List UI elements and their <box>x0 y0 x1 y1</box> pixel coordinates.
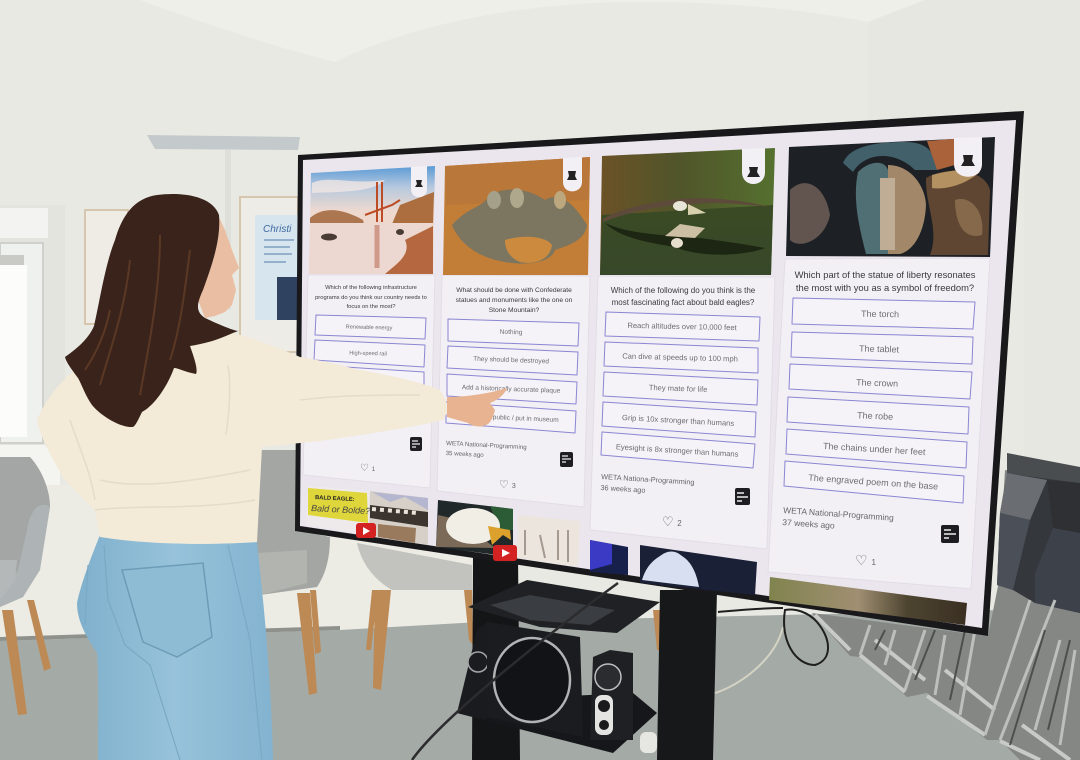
card 4 options: The engraved poem on the base <box>808 472 938 492</box>
chair: behind the woman <box>257 450 330 695</box>
wall posters <box>85 197 298 352</box>
card 4 image: statue of liberty <box>786 137 995 257</box>
display screen <box>300 120 1016 628</box>
card 1 panel <box>303 275 435 488</box>
card 3 badge <box>735 488 750 505</box>
card 2 options: Move to public / put in museum <box>467 413 559 424</box>
card 1 question: programs do you think our country needs to <box>315 295 427 301</box>
card 2 options: Add a historically accurate plaque <box>462 384 561 395</box>
card 4 author: 37 weeks ago <box>782 517 835 531</box>
card 3 question: most fascinating fact about bald eagles? <box>612 298 755 307</box>
window <box>0 205 65 485</box>
card 4 like count: ♡ 1 <box>855 552 876 568</box>
card 3 options: Eyesight is 8x stronger than humans <box>616 442 739 459</box>
chair: far left <box>0 457 51 715</box>
card 2 options: They should be destroyed <box>473 356 549 365</box>
stacked chairs <box>812 453 1080 760</box>
card 1 badge <box>410 437 422 451</box>
card 1 options: High-speed rail <box>349 351 387 357</box>
sweater <box>37 323 447 544</box>
card 4 options: The crown <box>856 377 898 389</box>
card 3 options: Can dive at speeds up to 100 mph <box>622 351 738 364</box>
card 3 author: WETA Nationa-Programming <box>601 472 695 487</box>
card 3 author: 36 weeks ago <box>600 483 646 495</box>
card 2 question: Stone Mountain? <box>489 307 540 314</box>
card 1 options: Renewable energy <box>346 324 393 332</box>
card 1 <box>303 166 435 488</box>
hair <box>65 194 238 427</box>
jeans pocket <box>122 563 212 657</box>
card 4 <box>768 137 995 589</box>
wall posters: Christi <box>263 224 292 235</box>
card 2 author: WETA National-Programming <box>446 440 527 451</box>
card 2 question: statues and monuments like the one on <box>456 297 573 304</box>
card 4 options: The torch <box>861 309 899 319</box>
power plug <box>640 732 657 753</box>
hair highlights <box>85 235 190 395</box>
card 4 options: The tablet <box>859 343 900 355</box>
card 3 options: They mate for life <box>649 383 708 394</box>
card 2 question: What should be done with Confederate <box>456 287 572 294</box>
thumbnail: bald eagle title: Bald or Bolde? <box>311 503 370 516</box>
thumbnail: blue <box>590 540 628 575</box>
card 1 question: Which of the following infrastructure <box>325 285 417 291</box>
card 1 options <box>314 315 426 392</box>
play buttons <box>356 523 517 561</box>
card 3 options <box>601 312 760 468</box>
card 3 image: bald eagle <box>600 148 775 275</box>
card 3 like count: ♡ 2 <box>662 514 682 529</box>
pin tabs <box>411 137 982 197</box>
card 4 options <box>784 298 975 503</box>
card 3 panel <box>590 276 775 549</box>
card 2 author: 35 weeks ago <box>445 450 484 459</box>
thumbnail: bald eagle title <box>306 486 370 535</box>
card 2 options: Nothing <box>500 329 523 336</box>
display stand <box>472 555 717 760</box>
card 4 options: The robe <box>857 410 893 422</box>
hand <box>447 388 507 426</box>
sweater folds <box>70 365 420 510</box>
card 3 <box>590 148 775 549</box>
card 2 <box>437 157 590 507</box>
card 2 options <box>446 319 579 433</box>
card 4 question: the most with you as a symbol of freedom? <box>796 282 974 293</box>
card 1 question: focus on the most? <box>347 304 396 310</box>
jeans seam <box>85 545 262 760</box>
wall light bar <box>147 135 300 310</box>
card 1 image: golden gate <box>309 166 435 274</box>
card 4 question: Which part of the statue of liberty resonates <box>795 269 976 280</box>
card 3 options: Grip is 10x stronger than humans <box>622 413 735 428</box>
face <box>198 213 239 318</box>
display frame <box>295 111 1024 636</box>
card 4 badge <box>941 525 959 543</box>
speaker shelf <box>457 580 660 753</box>
card 2 like count: ♡ 3 <box>499 479 516 491</box>
thumbnail: eagle head <box>436 500 513 557</box>
card 2 panel <box>437 275 590 507</box>
chair: under the display <box>357 543 661 690</box>
card 4 options: The chains under her feet <box>823 441 926 457</box>
thumbnail: bald eagle title: BALD EAGLE: <box>315 495 355 503</box>
cables <box>412 583 828 760</box>
thumbnail: white shirt <box>640 545 757 595</box>
jeans <box>77 535 273 760</box>
card 1 like count: ♡ 1 <box>360 463 376 474</box>
card 2 image: carved rock <box>443 157 590 275</box>
speaker <box>457 622 633 740</box>
thumbnail: film strip <box>369 491 428 545</box>
card 3 options: Reach altitudes over 10,000 feet <box>627 321 738 332</box>
thumbnail: forest <box>769 577 967 625</box>
woman <box>37 194 507 760</box>
card 4 author: WETA National-Programming <box>783 505 894 523</box>
card 3 question: Which of the following do you think is the <box>611 286 756 295</box>
card 4 panel <box>768 258 990 589</box>
thumbnail: sketch <box>516 515 580 567</box>
card 2 badge <box>560 452 573 467</box>
thumbnail row <box>306 486 967 625</box>
